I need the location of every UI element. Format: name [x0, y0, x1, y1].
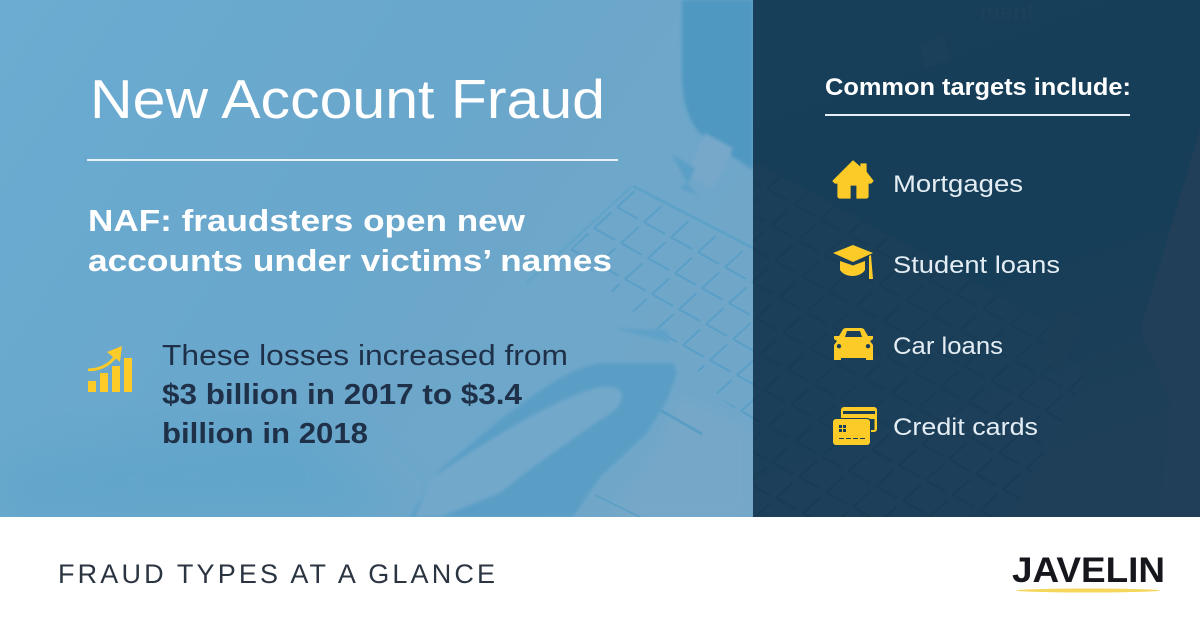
panel: blue photo background [0, 0, 753, 517]
heading: NAF definition [88, 204, 612, 278]
heading: NAF definition: accounts under victims’ names [88, 244, 612, 278]
heading: common targets: Common targets include: [825, 74, 1131, 101]
icon: credit cards [832, 407, 877, 446]
text block: losses statistic: billion in 2018 [162, 418, 368, 450]
targets divider [825, 114, 1130, 116]
footer tagline: FRAUD TYPES AT A GLANCE [58, 559, 495, 589]
label: credit cards: Credit cards [893, 414, 1038, 441]
logo: Javelin: JAVELIN [1012, 551, 1165, 590]
label: mortgages: Mortgages [893, 171, 1023, 198]
text block: losses statistic: $3 billion in 2017 to $3.4 [162, 379, 522, 411]
label: car loans: Car loans [893, 333, 1003, 360]
text block: losses statistic [162, 340, 568, 450]
icon: house [833, 161, 873, 198]
heading: NAF definition: NAF: fraudsters open new [88, 204, 525, 238]
title divider [87, 159, 618, 161]
text block: losses statistic: These losses increased from [162, 340, 568, 372]
icon: car [834, 328, 873, 360]
title: New Account Fraud [90, 68, 605, 130]
label: student loans: Student loans [893, 252, 1060, 279]
panel: white footer [0, 517, 1200, 628]
panel: dark targets background [753, 0, 1200, 517]
icon: graduation cap [833, 245, 873, 279]
icon: rising bar chart [88, 346, 132, 392]
